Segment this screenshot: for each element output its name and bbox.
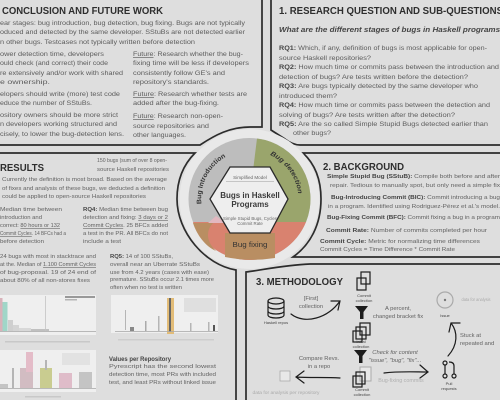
wheel band: pink strip by hexagon bbox=[208, 216, 226, 223]
text block: RQ5 finding: overall near an Uberrate SStuBs bbox=[110, 262, 200, 268]
text block: definitions: Commit Rate: Number of commits completed per hour bbox=[326, 228, 487, 234]
title: bugs in haskell programs bbox=[220, 191, 280, 209]
icon: database: Haskell repos bbox=[264, 320, 288, 325]
text block: conclusion summary: ear stages: bug introduction, bug detection, bug fixing. Bugs are not typically bbox=[0, 20, 246, 27]
arrow: commits to pull requests: Bug-fixing commits bbox=[378, 378, 424, 384]
text block: sub-questions: detection of bugs? Are tests written before the detection? bbox=[279, 74, 468, 81]
wheel segment: bug introduction bbox=[188, 138, 310, 260]
text block: RQ3 finding: 24 bugs with most in stacktrace and bbox=[0, 254, 96, 260]
icon: result box: data for analysis per repository bbox=[252, 390, 320, 396]
text block: conclusion summary: oduced and detected by the same developer. SStuBs are not detected earlier bbox=[0, 29, 246, 36]
arrow: collection to commits: collection bbox=[299, 304, 323, 310]
text block: recommendations: ository owners should be more strict bbox=[0, 112, 118, 119]
text block: RQ2 finding: before detection bbox=[0, 239, 44, 245]
text block: values per repository: test, and least PRs without linked issue bbox=[109, 380, 216, 386]
text: second filter description: "issue", "bug", "fix"... bbox=[369, 358, 421, 364]
text: dataset note: 150 bugs (sum of over 8 open- bbox=[97, 158, 167, 164]
title: bugs in haskell programs: Bugs in Haskell bbox=[220, 191, 280, 200]
icon: issue circle: data for analysis bbox=[462, 297, 491, 302]
label: bug fixing: Bug fixing bbox=[232, 242, 268, 249]
text: second filter description: Check for content bbox=[372, 350, 418, 356]
title: bugs in haskell programs: Programs bbox=[231, 200, 269, 209]
text block: RQ5 finding: use from 4.2 years (cases with ease) bbox=[110, 270, 209, 276]
arrow: pull requests to issues bbox=[448, 323, 494, 356]
text block: recommendations: re extensively and/or work with shared bbox=[0, 70, 123, 77]
text block: values per repository: detection time, most PRs with included bbox=[109, 372, 216, 378]
icon: all commits stack: collection bbox=[356, 298, 372, 303]
text block: sub-questions: RQ4: How much time or commits pass between the detection and bbox=[279, 102, 490, 109]
text block: RQ4 finding: include a test bbox=[83, 239, 121, 245]
panel: background bbox=[293, 153, 500, 257]
text block: future work: source repositories and bbox=[133, 123, 209, 130]
text block: definitions: Commit Cycle: Metric for normalizing time differences bbox=[320, 239, 480, 245]
chart: commit cycles per bug bbox=[111, 295, 218, 340]
text block: future work: consistently follow GE's and bbox=[133, 70, 225, 77]
text: main research question: What are the different stages of bugs in Haskell programs? bbox=[279, 25, 500, 34]
text: metrics note bbox=[223, 216, 278, 226]
text block: sub-questions: RQ5: Are the so called Simple Stupid Bugs detected earlier than bbox=[279, 121, 488, 128]
label: bug introduction: Bug Introduction bbox=[196, 154, 226, 204]
text block: RQ1 finding bbox=[2, 177, 167, 200]
text block: sub-questions: solving of bugs? Are tests written after the detection? bbox=[279, 112, 455, 119]
text block: RQ2 finding: introduction and bbox=[0, 215, 42, 221]
text block: sub-questions bbox=[279, 45, 499, 137]
wheel segment: bug fixing bbox=[193, 222, 306, 260]
text block: RQ3 finding: at the. Median of 1.100 Commit Cycles bbox=[0, 262, 96, 268]
icon: filtered commits stack: collection bbox=[353, 344, 369, 349]
text block: recommendations: n developers working structured and bbox=[0, 121, 117, 128]
text block: RQ3 finding: of bug-proposal. 19 of 24 end of bbox=[0, 270, 96, 276]
text block: RQ5 finding bbox=[110, 254, 214, 291]
text block: definitions: Simple Stupid Bug (SStuB): Compile both before and after bbox=[327, 174, 500, 180]
text block: RQ4 finding: a test in the PR. All BFCs do not bbox=[83, 231, 168, 237]
text block: recommendations: ower detection time, developers bbox=[0, 51, 105, 58]
icon: result box bbox=[252, 371, 320, 396]
arrow: collection to commits: [First] bbox=[304, 296, 319, 302]
text: first filter description: A percent, bbox=[385, 306, 411, 312]
icon: issue circle: Issue bbox=[440, 313, 451, 318]
label: bug detection: Bug detection bbox=[270, 151, 302, 194]
heading: results: RESULTS bbox=[0, 163, 44, 174]
text block: RQ1 finding: could be applied to open-source Haskell repositories bbox=[2, 194, 146, 200]
text: dataset note bbox=[97, 158, 169, 173]
arrow: commits to repository comparison bbox=[296, 356, 340, 383]
text block: RQ3 finding: about 80% of all non-stores fixes bbox=[0, 278, 90, 284]
text block: RQ4 finding: Commit Cycles. 25 BFCs added bbox=[83, 223, 168, 229]
arrow: collection to commits bbox=[291, 296, 340, 319]
chart: values per repository box plots bbox=[0, 350, 96, 398]
text: first filter description bbox=[373, 306, 423, 320]
text block: future work: Future : Research whether tests are bbox=[133, 91, 247, 98]
text block: RQ1 finding: Currently the definition is most broad. Based on the average bbox=[2, 177, 167, 183]
wheel segment: bug detection bbox=[250, 138, 310, 222]
icon: git pull request bbox=[441, 361, 457, 391]
text block: sub-questions: other bugs? bbox=[293, 130, 331, 137]
text block: conclusion summary bbox=[0, 20, 246, 46]
icon: git pull request: requests bbox=[441, 386, 457, 391]
icon: second filter funnel bbox=[354, 350, 367, 363]
text block: RQ3 finding bbox=[0, 254, 96, 284]
text: metrics note: Commit Rate bbox=[237, 221, 263, 226]
text block: definitions bbox=[320, 174, 500, 253]
text block: RQ5 finding: premature. SStuBs occur 2.1 times more bbox=[110, 277, 214, 283]
text block: recommendations: e ownership. bbox=[0, 79, 50, 86]
heading: conclusion and future work: CONCLUSION AND FUTURE WORK bbox=[2, 6, 164, 17]
arrow: pull requests to issues: Stuck at bbox=[460, 333, 481, 339]
text block: values per repository: Pyrescript has the second lowest bbox=[109, 364, 216, 370]
arrow: commits to repository comparison: in a repo bbox=[308, 364, 330, 370]
diagram: bug stages wheel bbox=[180, 129, 320, 269]
text: metrics note: Simple Stupid Bugs, Cycles bbox=[223, 216, 278, 221]
wheel band: lower left edge bbox=[193, 223, 216, 251]
icon: filtered commits stack: Initial bbox=[356, 339, 366, 344]
text block: RQ4 finding: detection and fixing: 3 days or 2 bbox=[83, 215, 168, 221]
icon: final commits stack: collection bbox=[354, 392, 370, 397]
chart: time distribution histogram bbox=[0, 295, 96, 342]
text block: sub-questions: RQ1: Which, if any, definition of bugs is most applicable for open- bbox=[279, 45, 487, 52]
text block: recommendations: ould check (and correct) their code bbox=[0, 60, 108, 67]
text block: future work: Future: Research whether the bug- bbox=[133, 51, 243, 58]
text block: RQ4 finding: RQ4: Median time between bug bbox=[83, 207, 168, 213]
panel: conclusion and future work bbox=[0, 0, 262, 145]
text block: future work bbox=[133, 51, 250, 139]
text block: recommendations: cisely, to lower the bug-detection lens. bbox=[0, 131, 124, 138]
panel: results bbox=[0, 153, 236, 400]
icon: all commits stack bbox=[356, 272, 372, 303]
text block: RQ2 finding: Median time between bbox=[0, 207, 62, 213]
text block: recommendations: educe the number of SStuBs. bbox=[0, 100, 92, 107]
arrow: commits to repository comparison: Compare Revs. bbox=[299, 356, 340, 362]
wheel band: bug fixing label background bbox=[225, 233, 275, 260]
icon: filtered commits stack bbox=[353, 323, 370, 349]
hexagon: central topic bbox=[210, 167, 288, 233]
icon: final commits stack: Commit bbox=[355, 387, 370, 392]
text block: values per repository bbox=[109, 356, 216, 386]
text block: conclusion summary: n other bugs. Testcases not typically written before detection bbox=[0, 39, 195, 46]
text block: sub-questions: RQ3: Are bugs typically detected by the same developer who bbox=[279, 83, 478, 90]
text block: recommendations bbox=[0, 51, 124, 138]
text block: future work: repository's standards. bbox=[133, 79, 209, 86]
icon: all commits stack: Commit bbox=[357, 293, 372, 298]
panel: research question and sub-questions bbox=[271, 0, 500, 145]
text block: RQ2 finding bbox=[0, 207, 67, 245]
icon: database bbox=[264, 298, 288, 325]
text block: RQ2 finding: correct: 80 hours or 132 bbox=[0, 223, 60, 229]
heading: background: 2. BACKGROUND bbox=[323, 162, 404, 173]
text block: future work: fixing time will be less if developers bbox=[133, 60, 250, 67]
text block: RQ5 finding: RQ5: 14 of 100 SStuBs, bbox=[110, 254, 173, 260]
text block: definitions: repair. Tedious to manually spot, but only need a simple fix bbox=[330, 183, 500, 189]
icon: final commits stack bbox=[353, 367, 371, 397]
text block: sub-questions: source Haskell repositories? bbox=[279, 55, 371, 62]
text block: recommendations: elopers should write (more) test code bbox=[0, 91, 120, 98]
text block: values per repository: Values per Repository bbox=[109, 356, 171, 363]
text: second filter description bbox=[369, 350, 421, 364]
text block: RQ4 finding bbox=[83, 207, 168, 245]
text block: RQ5 finding: often when no test is written bbox=[110, 285, 182, 291]
text block: sub-questions: introduced them? bbox=[279, 93, 337, 100]
panel: methodology bbox=[246, 264, 500, 400]
text: first filter description: changed bracket fix bbox=[373, 314, 423, 320]
text block: definitions: in a program. Identified using Rodriguez-Pérez et al.'s model. bbox=[328, 204, 500, 210]
icon: issue circle bbox=[437, 292, 491, 318]
text block: definitions: Bug-Fixing Commit (BFC): Commit fixing a bug in a program bbox=[327, 215, 500, 221]
icon: first filter funnel bbox=[355, 306, 368, 319]
text block: definitions: Bug-Introducing Commit (BIC): Commit introducing a bug bbox=[331, 195, 500, 201]
text block: future work: other languages. bbox=[133, 132, 186, 139]
heading: methodology: 3. METHODOLOGY bbox=[256, 277, 343, 288]
text block: RQ2 finding: Commit Cycles. 14 BFCs had a bbox=[0, 231, 67, 237]
icon: git pull request: Pull bbox=[446, 381, 452, 386]
arrow: commits to pull requests bbox=[378, 365, 428, 384]
text: dataset note: source Haskell repositories bbox=[97, 167, 169, 173]
text block: sub-questions: RQ2: How much time or commits pass between the introduction and bbox=[279, 64, 499, 71]
text block: future work: added after the bug-fixing. bbox=[133, 100, 219, 107]
text block: RQ1 finding: of fixes and analysis of these bugs, we deducted a definition bbox=[2, 186, 165, 192]
text block: definitions: Commit Cycles = Time Difference * Commit Rate bbox=[320, 247, 455, 253]
text: simplified model note: Simplified Model bbox=[233, 175, 267, 180]
arrow: pull requests to issues: repeated and bbox=[460, 341, 494, 347]
text block: future work: Future: Research non-open- bbox=[133, 113, 223, 120]
